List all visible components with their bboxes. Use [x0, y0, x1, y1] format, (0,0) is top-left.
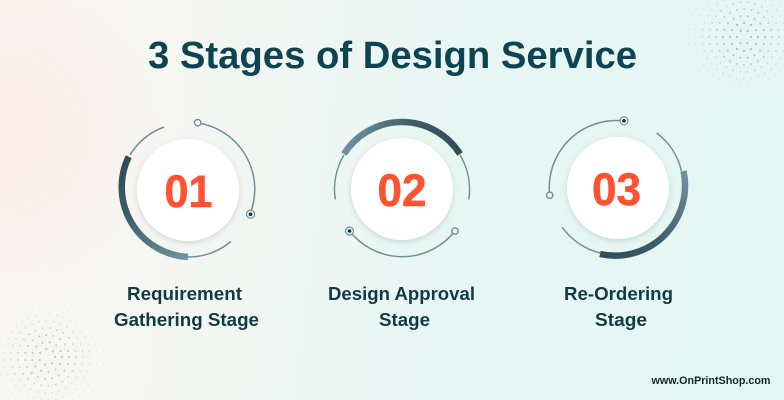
halftone dots: bottom left: [0, 292, 112, 400]
stage 1 number badge: 01: [164, 166, 212, 217]
title: 3 Stages of Design Service: [148, 35, 637, 77]
stage 3 ring: [546, 117, 685, 256]
stage 2 number badge: [351, 138, 453, 240]
halftone dots: top right: [679, 0, 784, 102]
stage 3 number badge: [567, 137, 669, 239]
stage 2: [328, 122, 475, 330]
stage 1 number badge: [137, 139, 239, 241]
stage 3 number badge: 03: [592, 164, 641, 215]
stage 3 label: Re-Ordering: [564, 284, 673, 304]
stage 3 label: Stage: [595, 310, 647, 330]
stage 1: [114, 120, 259, 330]
stage 1 label: Gathering Stage: [114, 310, 259, 330]
website url: www.OnPrintShop.com: [651, 375, 771, 387]
stage 2 label: Design Approval: [328, 284, 475, 304]
stage 2 number badge: 02: [378, 165, 426, 216]
stage 2 label: Stage: [379, 310, 430, 330]
stage 1 ring: [122, 120, 255, 257]
stage 3: [546, 117, 685, 330]
stage 2 ring: [335, 122, 470, 257]
background pink glow: [0, 0, 170, 300]
stage 1 label: Requirement: [127, 284, 242, 304]
